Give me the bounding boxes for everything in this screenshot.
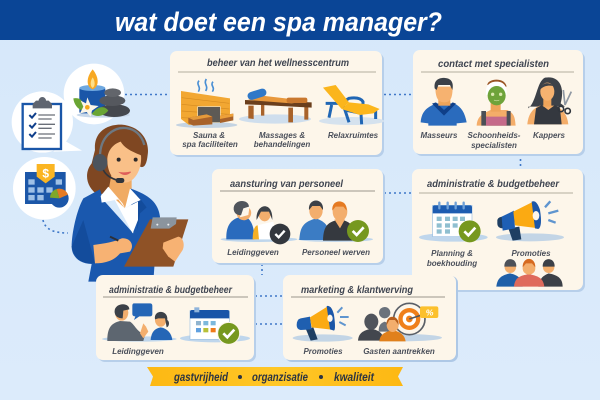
- callout: budget and calendar: $: [42, 166, 49, 180]
- icon: sauna: [176, 79, 237, 128]
- icon: calendar with check: [180, 307, 250, 344]
- label: spa faciliteiten: [182, 140, 238, 149]
- callout: budget and calendar: [13, 157, 76, 220]
- label: Kappers: [533, 131, 566, 140]
- label: specialisten: [471, 141, 517, 150]
- icon: guests and target: [358, 303, 442, 341]
- label: Promoties: [303, 347, 343, 356]
- panel: aansturing van personeel: [212, 169, 385, 265]
- hands: [93, 238, 132, 263]
- heading: beheer van het wellnesscentrum: [207, 57, 349, 69]
- icon: conversation: [102, 303, 177, 342]
- header band with title: wat doet een spa manager?: [115, 7, 442, 37]
- icon: beautician with face mask: [477, 80, 516, 126]
- dotted connector lines: [43, 94, 520, 324]
- panel: contact met specialisten: [413, 50, 585, 156]
- icon: team of three: [496, 259, 563, 287]
- manager with headset and clipboard: [72, 125, 188, 282]
- icon: guests and target: %: [426, 307, 434, 317]
- label: Gasten aantrekken: [363, 347, 435, 356]
- label: Planning &: [431, 249, 473, 258]
- icon: leadership pair: [221, 201, 297, 244]
- panel: administratie & budgetbeheer (right): [412, 169, 585, 292]
- headset: [100, 128, 144, 157]
- label: behandelingen: [254, 140, 310, 149]
- heading: administratie & budgetbeheer: [109, 284, 233, 296]
- label: Sauna &: [193, 131, 225, 140]
- icon: recruiting pair: [298, 200, 373, 242]
- value: gastvrijheid: [173, 372, 229, 384]
- panel: marketing & klantwerving: [283, 275, 458, 362]
- callout: checklist clipboard: [12, 91, 82, 153]
- icon: megaphone: [496, 201, 564, 241]
- label: Leidinggeven: [112, 347, 164, 356]
- icon: masseur: [421, 78, 467, 126]
- face: [107, 142, 141, 183]
- value: organzisatie: [252, 372, 308, 384]
- icon: calendar with check: [419, 203, 488, 242]
- heading: marketing & klantwerving: [301, 284, 414, 296]
- clipboard: [124, 219, 188, 267]
- label: Massages &: [259, 131, 305, 140]
- icon: lounge chair: [319, 85, 384, 125]
- icon: megaphone: [293, 306, 353, 342]
- heading: aansturing van personeel: [230, 178, 344, 190]
- label: boekhouding: [427, 259, 477, 268]
- jacket: [72, 188, 160, 282]
- panel: beheer van het wellnesscentrum: [170, 51, 384, 157]
- label: Personeel werven: [302, 248, 370, 257]
- label: Masseurs: [421, 131, 458, 140]
- label: Relaxruimtes: [328, 131, 379, 140]
- value: kwaliteit: [334, 372, 375, 384]
- callout: candle and stones: [64, 64, 130, 124]
- bullet: [319, 375, 323, 379]
- hair back: [87, 125, 148, 195]
- heading: administratie & budgetbeheer: [427, 178, 560, 190]
- label: Leidinggeven: [227, 248, 279, 257]
- heading: contact met specialisten: [438, 58, 549, 70]
- neck: [108, 173, 132, 209]
- shirt: [113, 197, 138, 233]
- header band with title: [0, 0, 600, 40]
- bullet: [238, 375, 242, 379]
- panel: administratie & budgetbeheer (left): [96, 275, 256, 362]
- ribbon: core values: [147, 367, 403, 386]
- icon: massage table: [239, 88, 312, 124]
- icon: hairdresser with scissors: [527, 77, 571, 124]
- label: Schoonheids-: [468, 131, 521, 140]
- label: Promoties: [511, 249, 551, 258]
- collar: [101, 187, 141, 208]
